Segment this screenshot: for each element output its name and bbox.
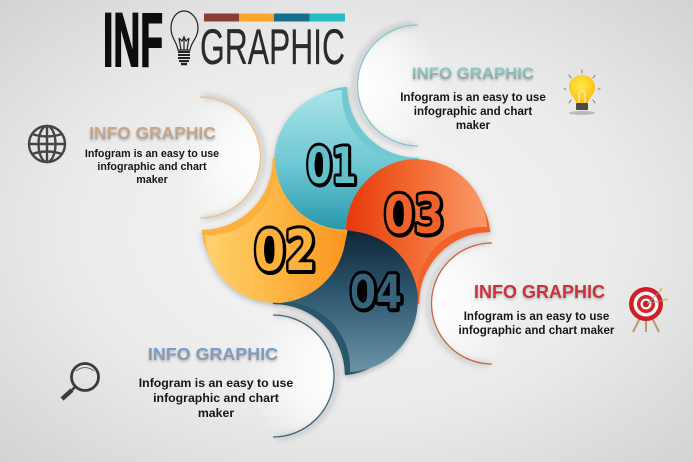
text block: maker bbox=[456, 119, 491, 132]
segment 03 orange-red bbox=[346, 159, 489, 303]
panel: right callout bbox=[428, 243, 615, 364]
heading: INFO GRAPHIC bbox=[412, 64, 534, 83]
segment 02 amber bbox=[203, 159, 346, 303]
pinwheel bbox=[203, 88, 489, 374]
number 04: 04 bbox=[350, 265, 402, 319]
segment 04 navy bbox=[274, 231, 418, 374]
icon: light bulb bbox=[564, 70, 600, 115]
heading: INFO GRAPHIC bbox=[89, 123, 216, 143]
logo: INF bbox=[103, 0, 163, 83]
text block: Infogram is an easy to use bbox=[464, 310, 610, 323]
heading: INFO GRAPHIC bbox=[474, 282, 605, 302]
logo icon: light bulb bbox=[171, 11, 198, 64]
logo word GRAPHIC: GRAPHIC bbox=[200, 19, 345, 75]
icon: globe bbox=[29, 126, 65, 162]
number 03: 03 bbox=[384, 185, 444, 246]
text block: infographic and chart bbox=[414, 105, 532, 118]
text block: maker bbox=[198, 406, 234, 420]
text block: infographic and chart maker bbox=[459, 324, 615, 337]
text block: Infogram is an easy to use bbox=[400, 91, 546, 104]
icon: target bbox=[629, 287, 668, 332]
segment 01 teal bbox=[274, 88, 418, 231]
text block: infographic and chart bbox=[153, 391, 279, 405]
text block: maker bbox=[136, 174, 168, 186]
number 02: 02 bbox=[254, 219, 316, 284]
text block: Infogram is an easy to use bbox=[139, 376, 293, 390]
heading: INFO GRAPHIC bbox=[148, 344, 278, 364]
icon: magnifier bbox=[62, 364, 98, 399]
panel: left callout bbox=[85, 97, 263, 218]
panel: bottom callout bbox=[139, 315, 337, 437]
logo colour bar bbox=[204, 14, 345, 22]
logo bbox=[103, 0, 345, 83]
panel: top right callout bbox=[355, 25, 546, 146]
number 01: 01 bbox=[306, 137, 356, 195]
text block: infographic and chart bbox=[97, 161, 207, 173]
text block: Infogram is an easy to use bbox=[85, 148, 219, 160]
